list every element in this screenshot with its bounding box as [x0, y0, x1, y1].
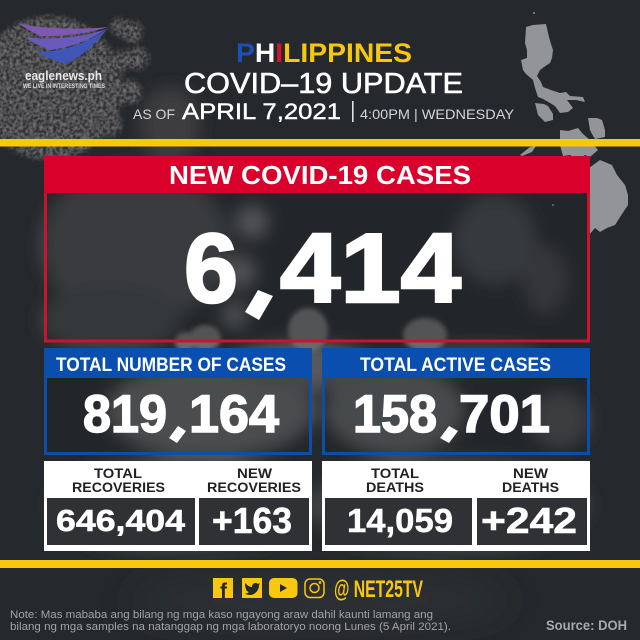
- date: APRIL 7,2021: [182, 99, 341, 124]
- footnote: [10, 609, 451, 633]
- number: 6,414: [184, 213, 461, 323]
- label: new recoveries: [207, 466, 301, 495]
- value: +242: +242: [481, 500, 577, 541]
- panel header: [44, 156, 590, 193]
- date prefix: AS OF: [133, 106, 175, 122]
- panel: new cases: [44, 156, 590, 341]
- number: 158,701: 701: [459, 385, 550, 444]
- logo tagline: WE LIVE IN INTERESTING TIMES: [23, 83, 105, 90]
- panel header: [322, 348, 590, 378]
- source: Source: DOH: [546, 618, 627, 633]
- bottom yellow band: [0, 560, 640, 568]
- panel frame: [324, 350, 588, 454]
- label: total recoveries: TOTAL: [94, 466, 142, 481]
- top yellow band: [0, 139, 640, 146]
- icon: youtube: [269, 578, 298, 598]
- footnote: bilang ng mga samples na natanggap ng mga laboratoryo noong Lunes (5 April 2021).: [10, 621, 451, 633]
- label: new deaths: NEW: [513, 466, 548, 481]
- heading: TOTAL ACTIVE CASES: [360, 355, 551, 376]
- white card: [44, 461, 312, 551]
- panel: recoveries: [44, 461, 312, 551]
- label: new recoveries: NEW: [237, 466, 272, 481]
- logo name: eaglenews.ph: [25, 68, 102, 83]
- logo: eaglenews.ph: [17, 23, 108, 90]
- label: total deaths: DEATHS: [366, 480, 424, 495]
- virus illustration top-left: [0, 16, 149, 160]
- value: 646,404: 646,404: [56, 503, 186, 538]
- background: lobes above stats: [175, 308, 447, 352]
- number: 158,701: 158: [353, 385, 437, 444]
- time and weekday: 4:00PM | WEDNESDAY: [360, 106, 515, 122]
- background: blurred virus imagery: [40, 87, 590, 555]
- white card: [322, 461, 590, 551]
- label: total deaths: [366, 466, 424, 495]
- panel header: [44, 348, 312, 378]
- heading: TOTAL NUMBER OF CASES: [56, 355, 286, 376]
- panel: deaths: [322, 461, 590, 551]
- heading: NEW COVID-19 CASES: [169, 160, 471, 190]
- label: total recoveries: [72, 466, 165, 495]
- value box: total recoveries: [47, 498, 195, 545]
- label: total recoveries: RECOVERIES: [72, 480, 165, 495]
- panel: total active cases: [322, 348, 590, 454]
- number: 6,414: 414: [280, 213, 461, 323]
- icon: facebook: [213, 578, 233, 603]
- number: 158,701: [353, 385, 550, 444]
- value: 14,059: 14,059: [347, 502, 453, 539]
- label: total deaths: TOTAL: [371, 466, 419, 481]
- label: new deaths: DEATHS: [502, 480, 559, 495]
- icon: wings: [17, 23, 108, 64]
- panel: total number of cases: [44, 348, 312, 454]
- panel frame: [46, 158, 588, 341]
- date separator: [352, 101, 354, 122]
- number: 819,164: [83, 385, 280, 444]
- title block: [133, 38, 515, 124]
- label: new recoveries: RECOVERIES: [207, 480, 301, 495]
- title: COVID-19 update: COVID–19 UPDATE: [184, 68, 463, 100]
- value box: new recoveries: [199, 498, 309, 545]
- value: +163: +163: [212, 500, 292, 541]
- icon: facebook: f: [220, 580, 228, 603]
- handle: @ NET25TV: [334, 576, 423, 603]
- background: footer glow: [130, 578, 510, 622]
- title: Philippines: PHILIPPINES: [236, 38, 412, 68]
- number: 6,414: 6: [184, 213, 238, 323]
- number: 819,164: 164: [189, 385, 280, 444]
- value box: total deaths: [325, 498, 472, 545]
- label: new deaths: [502, 466, 559, 495]
- panel frame: [46, 350, 310, 454]
- number: 819,164: 819: [83, 385, 167, 444]
- social media row: [213, 576, 423, 603]
- footnote: Note: Mas mababa ang bilang ng mga kaso ngayong araw dahil kaunti lamang ang: [10, 609, 433, 621]
- value box: new deaths: [477, 498, 587, 545]
- map of the Philippines: [520, 12, 628, 235]
- icon: twitter: [242, 578, 262, 598]
- icon: instagram: [305, 579, 324, 598]
